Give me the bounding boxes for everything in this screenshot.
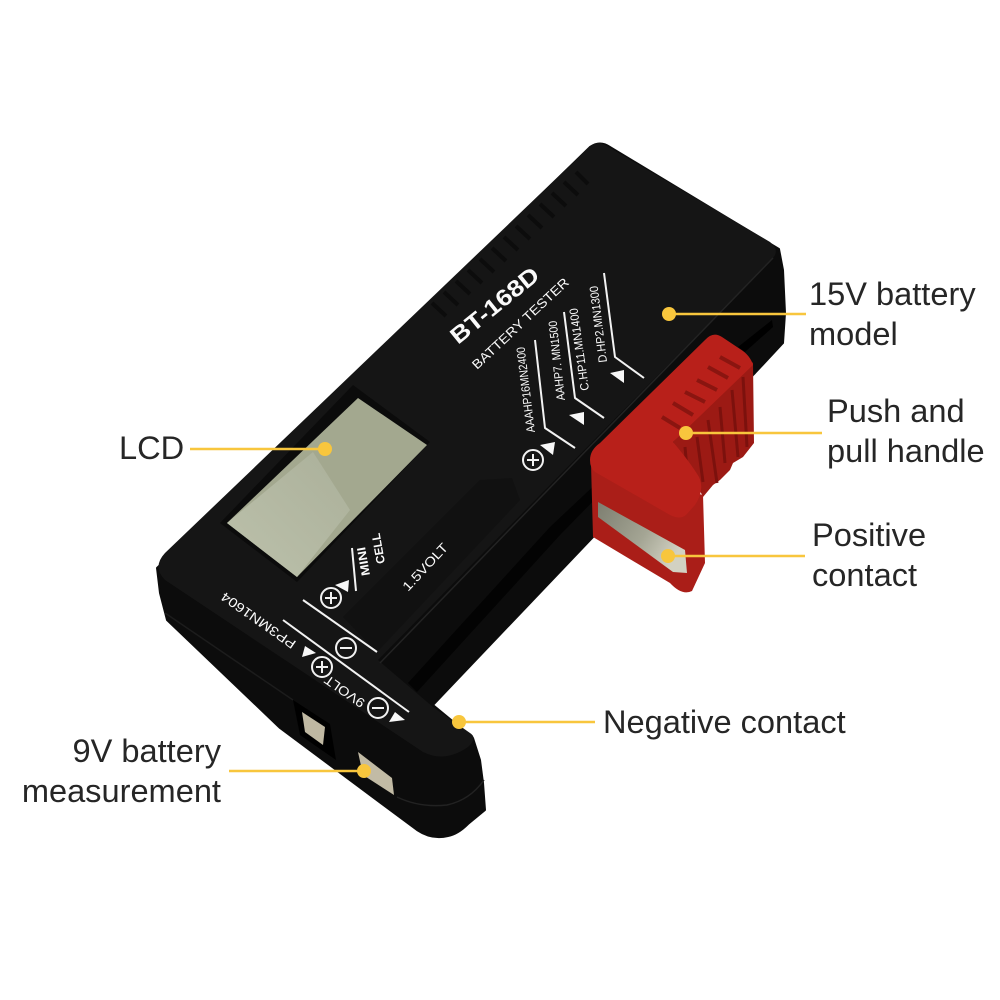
callout: 9V battery measurement: 9V battery bbox=[72, 732, 222, 769]
9V marks bbox=[302, 646, 405, 722]
callout: positive contact bbox=[661, 516, 926, 593]
side seam bbox=[165, 613, 293, 700]
red slider handle bbox=[590, 335, 754, 592]
handle top face bbox=[590, 335, 753, 518]
callout: push and pull handle: pull handle bbox=[827, 432, 985, 469]
callout: 15V battery model: model bbox=[809, 315, 898, 352]
front contact left bbox=[293, 700, 336, 760]
ribs on top edge bbox=[432, 172, 588, 316]
bracket lines bbox=[535, 273, 644, 448]
mini cell marks bbox=[321, 532, 388, 608]
mini cell recess bbox=[343, 478, 520, 652]
model name: BT-168D bbox=[445, 261, 544, 349]
9V marks: 9VOLT bbox=[321, 672, 368, 711]
callout: negative contact: Negative contact bbox=[603, 703, 846, 740]
LCD frame bbox=[220, 385, 430, 582]
callout: push and pull handle bbox=[679, 392, 985, 469]
triangles bbox=[540, 370, 624, 455]
callout: 15V battery model bbox=[662, 275, 976, 352]
callout: push and pull handle: Push and bbox=[827, 392, 965, 429]
subtitle: BATTERY TESTER bbox=[469, 275, 572, 372]
size label AAA: AAAHP16MN2400 bbox=[514, 346, 538, 433]
1.5 volt label: 1.5VOLT bbox=[399, 540, 451, 594]
callout: 9V battery measurement bbox=[22, 732, 371, 809]
body side and base bbox=[157, 144, 785, 837]
LCD glare bbox=[227, 452, 350, 577]
size label C: C.HP11.MN1400 bbox=[567, 307, 592, 392]
mini cell marks: CELL bbox=[369, 532, 388, 565]
rear right slot bbox=[738, 320, 773, 352]
plus symbol top bbox=[523, 450, 543, 470]
mini cell marks: MINI bbox=[354, 546, 373, 577]
foot seam bbox=[397, 780, 484, 806]
callout: negative contact bbox=[452, 703, 846, 740]
top face bbox=[158, 143, 776, 756]
size label D: D.HP2.MN1300 bbox=[587, 285, 610, 363]
callout: positive contact: contact bbox=[812, 556, 917, 593]
callout: LCD bbox=[119, 429, 332, 466]
handle fins bbox=[673, 360, 754, 497]
handle grooves bbox=[662, 357, 740, 428]
front contact right bbox=[358, 752, 394, 795]
rail edge line bbox=[380, 258, 773, 663]
LCD screen bbox=[227, 398, 427, 577]
minus line and symbol bbox=[303, 600, 377, 658]
9V battery model text: PP3MN1604 bbox=[218, 589, 299, 652]
printed markings bbox=[218, 261, 644, 722]
9 volt divider bbox=[283, 620, 409, 712]
battery tester device bbox=[157, 143, 785, 837]
callout: 15V battery model: 15V battery bbox=[809, 275, 976, 312]
handle lower face bbox=[591, 463, 705, 592]
size label AA: AAHP7. MN1500 bbox=[546, 320, 568, 401]
callout: LCD: LCD bbox=[119, 429, 184, 466]
positive metal contact bbox=[598, 502, 687, 573]
callout: 9V battery measurement: measurement bbox=[22, 772, 221, 809]
battery slide slot bbox=[408, 480, 606, 692]
callout: positive contact: Positive bbox=[812, 516, 926, 553]
